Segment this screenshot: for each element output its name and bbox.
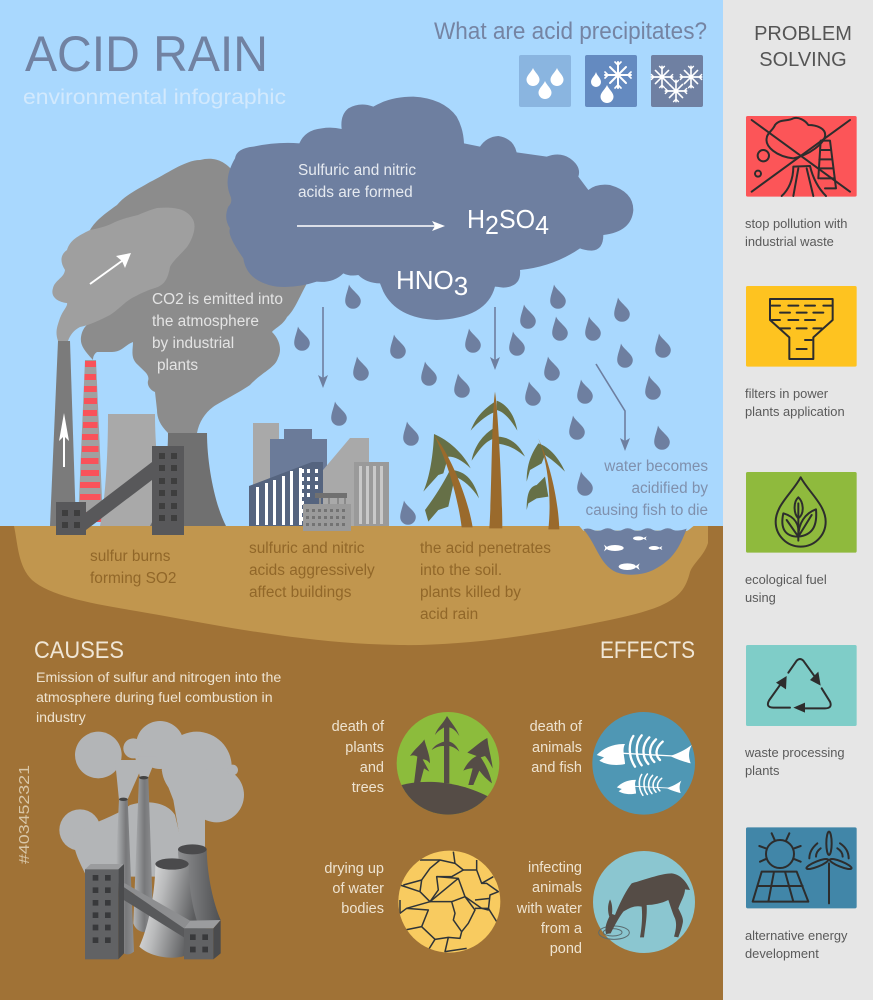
text: waste processing: plants	[745, 763, 779, 778]
effect: death of animals and fish: death of	[530, 719, 583, 735]
text: alternative energy	[745, 928, 848, 961]
sidebar heading: SOLVING	[759, 49, 847, 71]
subtitle: environmental infographic	[23, 86, 286, 109]
effect: infecting animals: with water	[516, 901, 582, 917]
acid rain drops	[294, 284, 671, 525]
text: filters: plants application	[745, 404, 845, 419]
text: water becomes acidified	[586, 458, 708, 519]
text: acid penetrates soil	[420, 540, 551, 623]
stock reference number: #403452321	[16, 765, 33, 864]
effect: death of plants and trees: trees	[352, 780, 384, 796]
panel: problem solving sidebar	[723, 0, 873, 1000]
arrow: smoke rising	[90, 253, 131, 284]
effect: infecting animals	[516, 851, 695, 957]
cloud text: Sulfuric and nitric	[298, 162, 416, 179]
text: sulfur burns: sulfur burns	[90, 548, 171, 565]
text: water becomes acidified: water becomes	[603, 458, 708, 475]
text: stop pollution: industrial waste	[745, 234, 834, 249]
effect: death of animals and fish	[530, 712, 695, 815]
CO2 text: CO2 is emitted into	[152, 291, 283, 308]
heading: effects: EFFECTS	[600, 637, 695, 664]
acid cloud	[226, 97, 633, 320]
icon: rain drops	[519, 55, 571, 107]
pond with fish	[578, 525, 695, 575]
effect: infecting animals: animals	[532, 880, 582, 896]
CO2 text: plants	[157, 357, 198, 374]
text: acids affect buildings	[249, 540, 375, 601]
cooling tower: light	[100, 414, 168, 526]
conveyor	[80, 462, 152, 530]
effect: drying up of water bodies: bodies	[341, 901, 384, 917]
dying trees	[423, 392, 565, 529]
arrow: rain down over trees	[490, 307, 500, 370]
text: waste processing: waste processing	[744, 745, 845, 760]
panel: light topsoil	[14, 526, 708, 645]
heading: causes: CAUSES	[34, 637, 124, 664]
icon: recycling	[746, 645, 857, 726]
formula: H2SO4: 2	[485, 210, 499, 240]
text: sulfur burns: forming SO2	[90, 570, 176, 587]
text: ecological fuel: using	[745, 590, 776, 605]
sidebar heading: PROBLEM	[754, 23, 852, 45]
factory building: small	[56, 502, 86, 535]
text: stop pollution	[745, 216, 847, 249]
dark smoke plume	[81, 159, 310, 433]
text: acids affect buildings: affect buildings	[249, 584, 352, 601]
arrow: acids formed	[297, 221, 445, 231]
effect: drying up of water bodies: of water	[332, 881, 384, 897]
light smoke plume	[52, 208, 195, 341]
arrow: up the stack	[59, 413, 69, 467]
illustration: factory with smoke	[59, 721, 244, 959]
text: acids affect buildings: sulfuric and nitric	[249, 540, 365, 557]
effect: drying up of water bodies	[324, 851, 500, 953]
causes description: atmosphere during fuel combustion in	[36, 690, 273, 706]
text: water becomes acidified: acidified by	[631, 480, 708, 497]
text: waste processing	[744, 745, 845, 778]
text: alternative energy: development	[745, 946, 819, 961]
causes description	[36, 670, 281, 726]
formula: H2SO4: 4	[535, 210, 549, 240]
CO2 text	[152, 291, 283, 374]
formula: H2SO4: H	[467, 204, 486, 234]
title: ACID RAIN	[25, 26, 268, 82]
text: ecological fuel: ecological fuel	[745, 572, 827, 587]
cooling tower: dark	[150, 433, 226, 526]
text: alternative energy: alternative energy	[745, 928, 848, 943]
effect: death of plants and trees: and	[360, 760, 384, 776]
heading: what are acid precipitates: What are acid precipitates?	[434, 18, 707, 45]
arrow: rain into water	[596, 364, 630, 451]
effect: death of plants and trees: plants	[345, 740, 384, 756]
formula: H2SO4: SO	[499, 204, 535, 234]
effect: death of animals and fish: and fish	[531, 760, 582, 776]
text: water becomes acidified: causing fish to die	[586, 502, 708, 519]
CO2 text: by industrial	[152, 335, 234, 352]
CO2 text: the atmosphere	[152, 313, 259, 330]
text: filters	[745, 386, 845, 419]
effect: infecting animals: from a	[541, 921, 583, 937]
cloud text	[298, 162, 416, 201]
text: acid penetrates soil: acid rain	[420, 606, 478, 623]
text: acids affect buildings: acids aggressively	[249, 562, 375, 579]
text: acid penetrates soil: the acid penetrates	[420, 540, 551, 557]
effect: infecting animals: pond	[550, 941, 582, 957]
icon: stop pollution	[746, 116, 857, 197]
formula: HNO3: HNO	[396, 265, 454, 295]
icon: ecological fuel	[746, 472, 857, 553]
chimney: grey stack	[50, 341, 76, 526]
causes description: Emission of sulfur and nitrogen into the	[36, 670, 281, 686]
effect: death of plants and trees: death of	[332, 719, 385, 735]
factory building: tall	[152, 446, 184, 535]
effect: drying up of water bodies: drying up	[324, 861, 384, 877]
text: acid penetrates soil: plants killed by	[420, 584, 521, 601]
sidebar heading	[754, 23, 852, 71]
icon: solar and wind	[746, 827, 857, 908]
cloud text: acids are formed	[298, 184, 413, 201]
icon: rain and snow	[585, 55, 637, 107]
text: stop pollution: stop pollution with	[745, 216, 847, 231]
arrow: rain down over city	[318, 307, 328, 388]
icon: snowflakes	[651, 55, 703, 107]
text: acid penetrates soil: into the soil.	[420, 562, 502, 579]
chimney: striped red stack	[78, 360, 103, 522]
icon: filters	[746, 286, 857, 367]
effect: death of animals and fish: animals	[532, 740, 582, 756]
effect: infecting animals: infecting	[528, 860, 582, 876]
panel: brown ground	[0, 526, 723, 1000]
text: ecological fuel	[745, 572, 827, 605]
effect: death of plants and trees	[332, 712, 500, 820]
city buildings	[249, 423, 389, 531]
causes description: industry	[36, 710, 87, 726]
text: filters: filters in power	[745, 386, 829, 401]
text: sulfur burns	[90, 548, 176, 587]
formula: HNO3: 3	[454, 271, 468, 301]
